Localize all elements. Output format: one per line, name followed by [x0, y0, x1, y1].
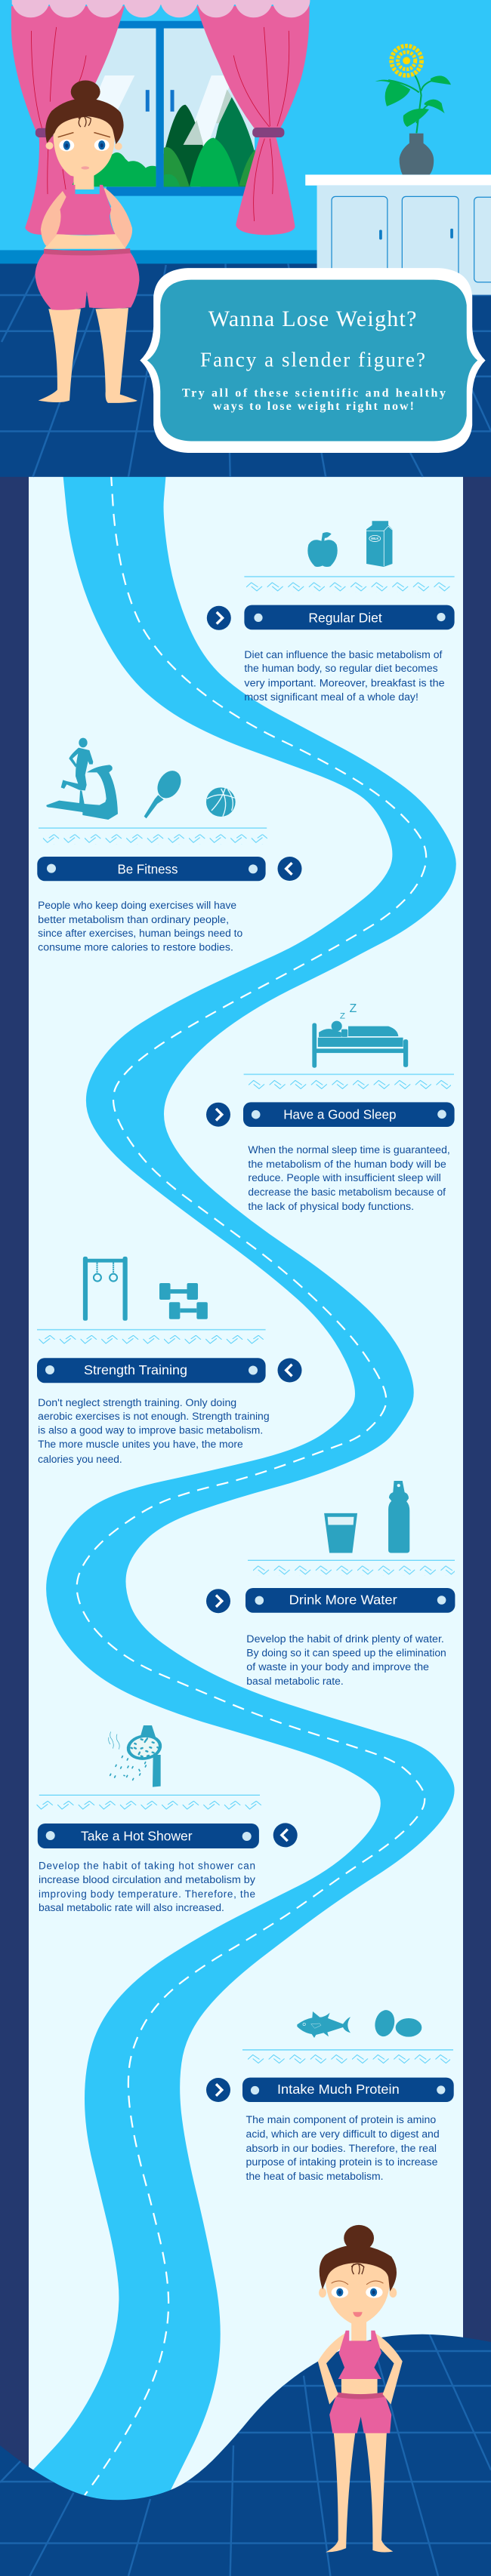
icon: apple — [307, 532, 338, 567]
arrow button — [273, 1823, 298, 1847]
icon: milk carton — [366, 521, 392, 567]
text: hot shower — [39, 1860, 255, 1913]
text: intake much protein: The main component of protein is amino — [246, 2114, 436, 2125]
section: hot shower — [36, 1725, 298, 1913]
icon: person sleeping in bed — [312, 1002, 408, 1068]
heading: be fitness — [37, 857, 266, 881]
text: hot shower: improving body temperature. Therefore, the — [39, 1888, 255, 1900]
icon: treadmill runner — [46, 738, 118, 820]
text: intake much protein: acid, which are very difficult to digest and — [246, 2128, 440, 2140]
arrow button — [206, 1589, 230, 1613]
text: drink more water: By doing so it can speed up the elimination — [246, 1647, 446, 1658]
banner text — [182, 306, 446, 413]
section: be fitness — [37, 738, 302, 953]
text: regular diet: very important. Moreover, breakfast is the — [244, 677, 445, 688]
heading: strength training — [37, 1358, 266, 1383]
text: good sleep: decrease the basic metabolism because of — [248, 1186, 446, 1198]
text: strength training: calories you need. — [38, 1454, 122, 1465]
text: good sleep — [248, 1144, 450, 1212]
icon: shower head — [109, 1725, 163, 1787]
heading: intake much protein — [242, 2078, 454, 2102]
curtain valance — [12, 0, 310, 17]
icon: gymnastic rings — [83, 1257, 128, 1321]
text: regular diet: Diet can influence the basic metabolism of — [244, 649, 443, 660]
icon: glass of water — [324, 1513, 357, 1553]
hero room scene — [0, 0, 491, 477]
text: strength training: aerobic exercises is not enough. Strength training — [38, 1411, 270, 1422]
text: good sleep: the metabolism of the human body will be — [248, 1159, 446, 1170]
arrow button — [206, 2078, 230, 2102]
text: drink more water — [246, 1633, 446, 1687]
arrow button — [206, 1103, 230, 1127]
icon: dumbbells — [159, 1283, 208, 1319]
banner text: Try all of these scientific and healthy — [182, 386, 446, 399]
window — [72, 21, 255, 196]
text: drink more water: Develop the habit of drink plenty of water. — [246, 1633, 444, 1645]
potted flower — [375, 46, 451, 174]
text: hot shower: increase blood circulation and metabolism by — [39, 1874, 255, 1885]
icon: milk carton: MILK — [371, 537, 378, 540]
heading: intake much protein: Intake Much Protein — [277, 2082, 400, 2097]
heading: regular diet — [244, 605, 455, 629]
cabinet — [305, 174, 491, 295]
icon: water bottle — [388, 1481, 409, 1553]
section: good sleep — [206, 1002, 455, 1212]
arrow button — [278, 1359, 302, 1383]
text: be fitness: People who keep doing exercises will have — [38, 900, 236, 911]
text: good sleep: reduce. People with insufficient sleep will — [248, 1172, 441, 1183]
section: strength training — [37, 1257, 302, 1465]
heading: regular diet: Regular Diet — [308, 610, 382, 625]
icon: person sleeping in bed: Z — [350, 1002, 357, 1015]
side bands — [0, 472, 491, 2510]
text: intake much protein: absorb in our bodies. Therefore, the real — [246, 2143, 437, 2154]
left curtain — [11, 6, 125, 235]
text: good sleep: When the normal sleep time is guaranteed, — [248, 1144, 450, 1156]
banner text: ways to lose weight right now! — [213, 400, 414, 413]
text: be fitness: better metabolism than ordinary people, — [38, 914, 229, 925]
heading: drink more water: Drink More Water — [289, 1592, 397, 1607]
heading: be fitness: Be Fitness — [118, 862, 178, 877]
banner text: Fancy a slender figure? — [200, 349, 425, 371]
heading: strength training: Strength Training — [84, 1362, 187, 1377]
text: strength training — [38, 1397, 270, 1465]
icon: person sleeping in bed: Z — [340, 1011, 345, 1020]
text: be fitness: consume more calories to restore bodies. — [38, 942, 233, 953]
heading: take a hot shower: Take a Hot Shower — [81, 1828, 193, 1843]
text: intake much protein — [246, 2114, 440, 2182]
text: be fitness: since after exercises, human beings need to — [38, 928, 242, 939]
right curtain — [196, 6, 310, 235]
text: strength training: The more muscle unites you have, the more — [38, 1439, 243, 1450]
bottom wavy floor — [0, 2334, 491, 2576]
tiled floor — [0, 263, 491, 477]
text: regular diet — [244, 649, 445, 703]
heading: have a good sleep: Have a Good Sleep — [283, 1106, 396, 1122]
winding road — [29, 472, 456, 2521]
section: intake much protein — [206, 2008, 454, 2182]
text: drink more water: basal metabolic rate. — [246, 1676, 344, 1687]
arrow button — [278, 857, 302, 881]
overweight girl — [35, 81, 139, 403]
baseboard — [0, 250, 320, 264]
room wall — [0, 0, 491, 265]
banner text: Wanna Lose Weight? — [208, 306, 416, 331]
text: intake much protein: purpose of intaking protein is to increase — [246, 2156, 438, 2168]
heading: drink more water — [246, 1588, 455, 1613]
heading: have a good sleep — [243, 1102, 455, 1127]
content panel — [29, 472, 463, 2510]
text: regular diet: the human body, so regular diet becomes — [244, 663, 438, 674]
text: strength training: is also a good way to improve basic metabolism. — [38, 1425, 263, 1436]
section: regular diet — [207, 521, 455, 703]
title banner — [140, 268, 486, 453]
icon: eggs — [372, 2008, 422, 2039]
text: drink more water: of waste in your body and improve the — [246, 1661, 429, 1673]
text: hot shower: basal metabolic rate will also increased. — [39, 1902, 224, 1913]
arrow button — [207, 606, 231, 630]
text: strength training: Don't neglect strength training. Only doing — [38, 1397, 236, 1408]
slim girl — [318, 2225, 403, 2553]
icon: tuna fish — [297, 2011, 350, 2038]
text: intake much protein: the heat of basic metabolism. — [246, 2171, 384, 2182]
heading: take a hot shower — [38, 1824, 259, 1848]
text: regular diet: most significant meal of a whole day! — [244, 691, 418, 703]
text: hot shower: Develop the habit of taking hot shower can — [39, 1860, 255, 1871]
section: drink more water — [206, 1481, 455, 1687]
icon: tennis racket — [144, 767, 186, 818]
icon: basketball — [206, 787, 236, 817]
text: good sleep: the lack of physical body functions. — [248, 1201, 414, 1212]
text: be fitness — [38, 900, 242, 953]
